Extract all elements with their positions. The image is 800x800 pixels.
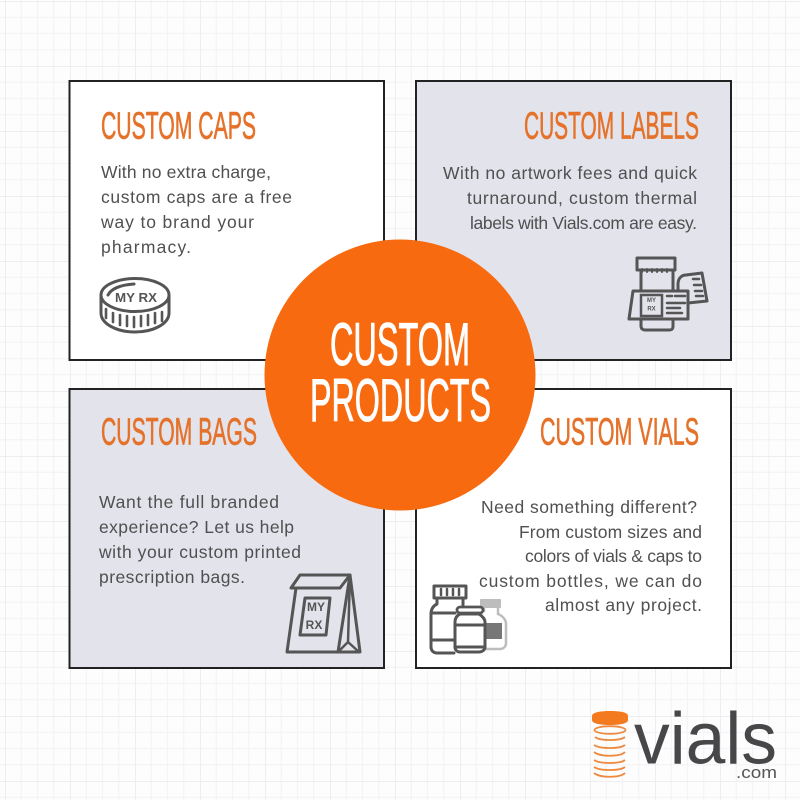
icon: label and vial: MY (647, 298, 656, 304)
text block: custom caps (100, 162, 292, 257)
text block: custom labels: turnaround, custom thermal (467, 188, 697, 208)
center circle: custom products: CUSTOM (330, 311, 470, 378)
icon: cap: MY RX (115, 291, 158, 305)
text block: custom bags: with your custom printed (98, 542, 301, 562)
icon: label and vial (629, 258, 707, 330)
logo: vials.com (592, 698, 777, 782)
wordmark: vials (634, 698, 777, 780)
center circle: custom products (264, 240, 536, 510)
text block: custom labels: With no artwork fees and quick (443, 163, 697, 183)
text block: custom caps: way to brand your (100, 212, 254, 232)
text block: custom caps: With no extra charge, (101, 162, 271, 182)
text block: custom vials (479, 497, 702, 615)
heading: custom bags: CUSTOM BAGS (101, 412, 257, 454)
text block: custom vials: almost any project. (545, 595, 702, 615)
text block: custom caps: custom caps are a free (101, 187, 292, 207)
icon: stack of vial caps (592, 711, 628, 777)
text block: custom bags: experience? Let us help (99, 517, 294, 537)
icon: paper bag: MY (307, 600, 325, 614)
icon: label and vial: RX (647, 306, 656, 312)
text block: custom vials: custom bottles, we can do (479, 571, 702, 591)
text block: custom vials: colors of vials & caps to (525, 546, 702, 566)
panel: custom vials (416, 389, 731, 668)
wordmark suffix: .com (736, 763, 777, 782)
icon: cap (101, 278, 169, 332)
text block: custom bags: Want the full branded (99, 492, 279, 512)
text block: custom vials: Need something different? (481, 497, 697, 517)
center circle: custom products: PRODUCTS (310, 367, 491, 434)
panel: custom labels (416, 81, 731, 360)
panel: custom bags (70, 389, 384, 668)
text block: custom vials: From custom sizes and (519, 522, 702, 542)
heading: custom caps: CUSTOM CAPS (101, 106, 256, 148)
text block: custom bags (98, 492, 301, 587)
text block: custom bags: prescription bags. (99, 567, 245, 587)
text block: custom caps: pharmacy. (101, 237, 191, 257)
icon: paper bag: RX (306, 618, 322, 632)
icon: paper bag (287, 575, 360, 652)
icon: bottles (431, 586, 506, 653)
panel: custom caps (70, 81, 384, 360)
text block: custom labels: labels with Vials.com are easy. (470, 213, 697, 233)
text block: custom labels (443, 163, 697, 233)
